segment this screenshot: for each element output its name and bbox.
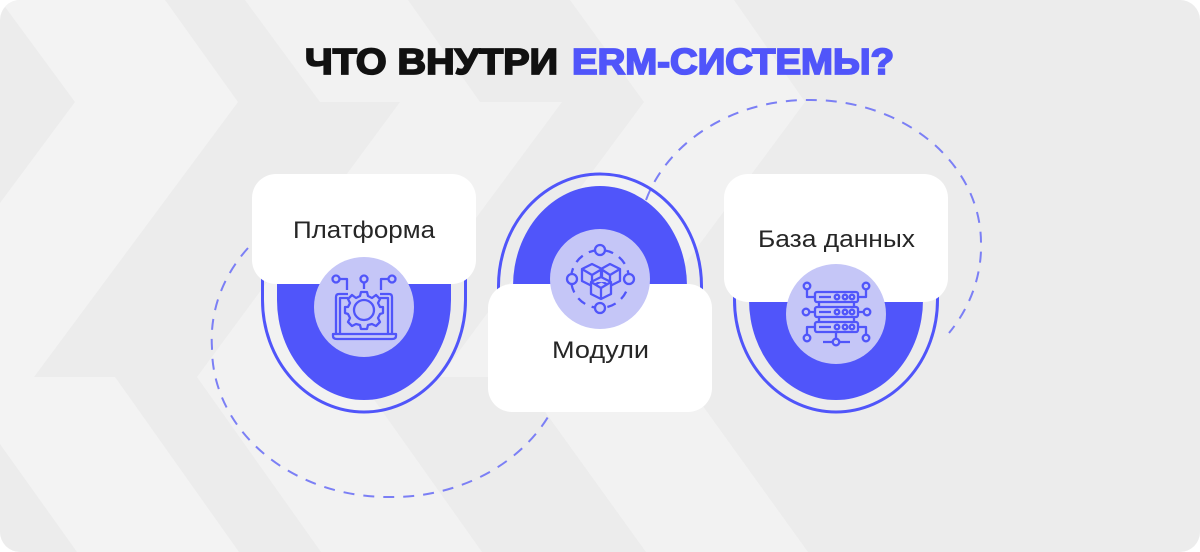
title: ERM-СИСТЕМЫ? [572,41,894,82]
blue half shape [749,290,923,400]
dashed connector: lower arc [212,248,548,497]
outer outline [498,174,702,300]
block: Модули [488,174,712,412]
dashed connector: upper arc [646,100,981,333]
white card [252,174,476,284]
blue half shape [277,270,451,400]
label: Модули [552,337,649,364]
icon circle [314,257,414,357]
white card [488,284,712,412]
label: Платформа [293,217,436,244]
blue half shape [513,186,687,300]
block: База данных [724,174,948,412]
title [305,41,894,82]
label: База данных [758,226,915,253]
icon: laptop with gear [332,276,396,339]
outer outline [262,270,466,412]
icon circle [786,264,886,364]
white card [724,174,948,302]
icon circle [550,229,650,329]
outer outline [734,280,938,412]
icon: server rack [803,283,870,345]
title: ЧТО ВНУТРИ [305,41,558,82]
icon: cubes with nodes [567,245,634,313]
block: Платформа [252,174,476,412]
